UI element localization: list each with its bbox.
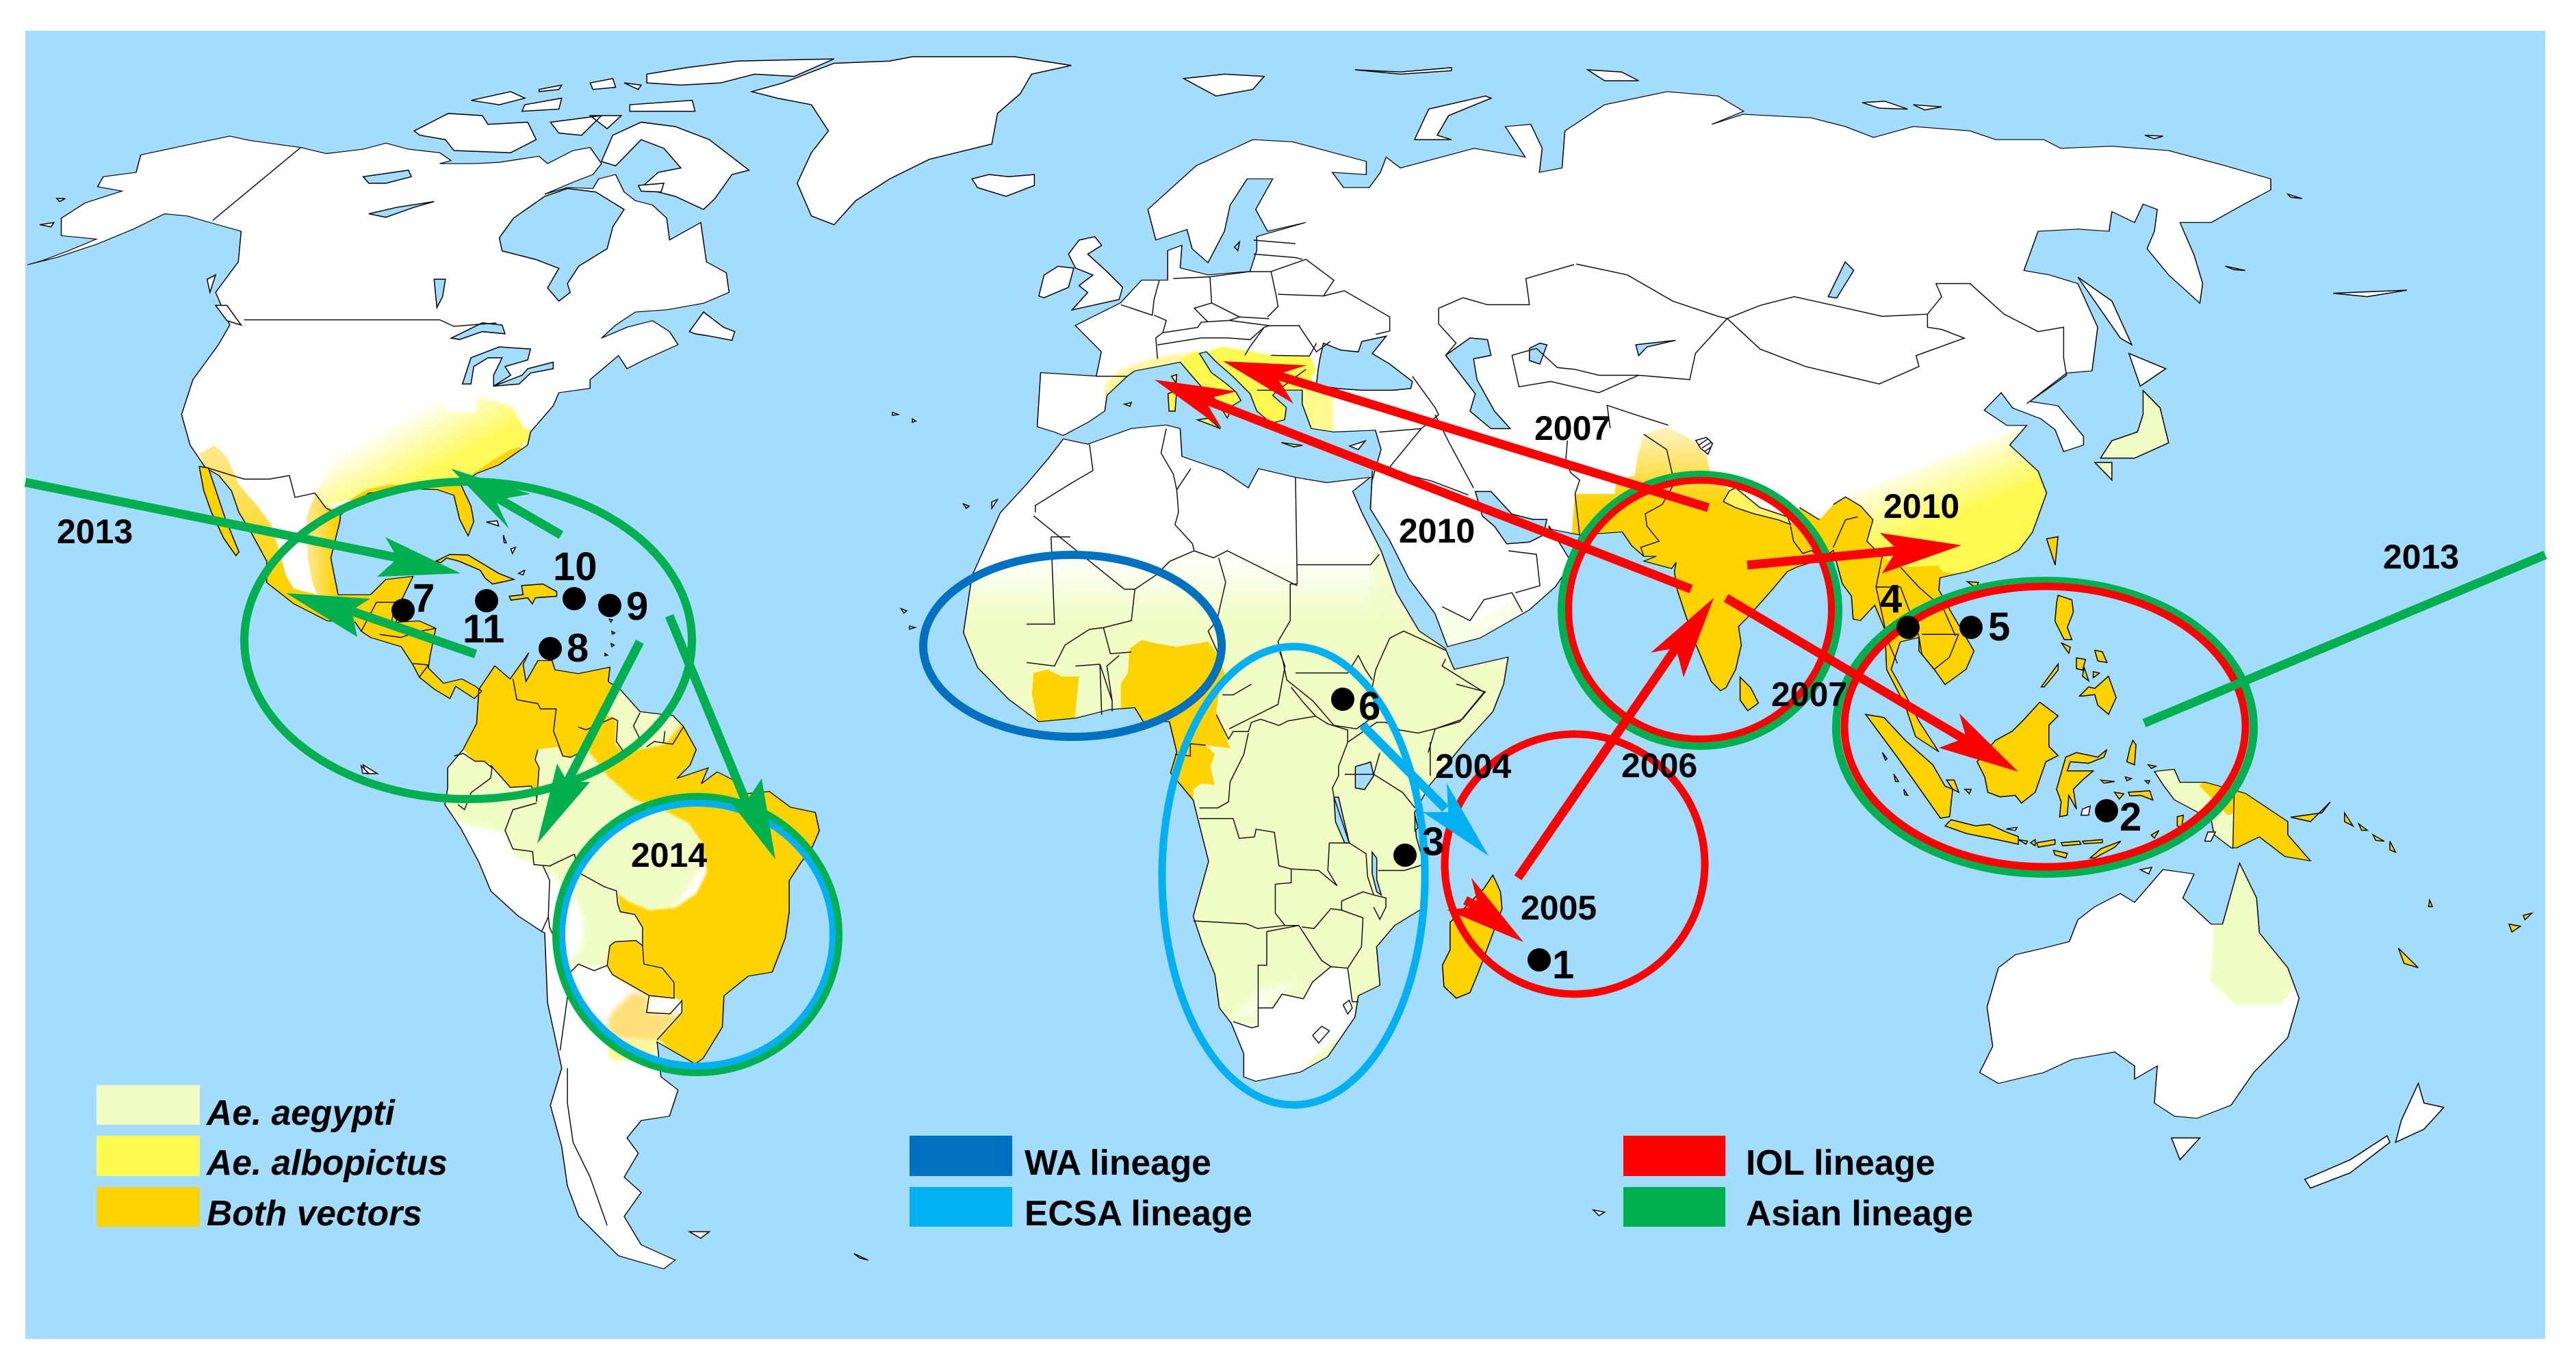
arrow: India to Southeast Asia 2007 (1726, 598, 2018, 772)
region: Peru Bolivia and west Brazil Ae. aegypti (419, 744, 707, 967)
region: Cameroon and Gabon both vectors (1160, 678, 1230, 802)
lineage ring: WA lineage West Africa (923, 555, 1222, 737)
region: Queensland Ae. aegypti (2211, 857, 2293, 1004)
region: Paraguay both vectors (607, 941, 674, 998)
islands: Japan Ae. aegypti (2095, 391, 2169, 480)
lineage ring: IOL and Asian lineages India (1562, 475, 1838, 746)
year labels (57, 409, 2459, 927)
numbered location markers: 5 (1988, 605, 2010, 649)
numbered location markers (391, 545, 2141, 987)
region: Mexico and Central America both vectors (199, 445, 466, 698)
legend: vectors: Ae. aegypti (205, 1093, 396, 1132)
lineage ring: Asian and ECSA lineages Brazil (556, 796, 839, 1073)
numbered location markers: 10 (553, 545, 597, 589)
arrow: East Africa to Indian Ocean 2004 (1363, 725, 1489, 856)
arrow: Asian lineage 2013 into Southeast Asia (2144, 555, 2545, 723)
lineage ring: Asian lineage Caribbean (244, 482, 692, 799)
year labels: 2010 (1399, 512, 1475, 550)
country borders (204, 148, 2234, 1225)
numbered location markers: 9 (626, 584, 648, 629)
arrow: Madagascar to Reunion 2005 (1447, 878, 1523, 942)
arrow: India to China 2010 (1747, 533, 1961, 573)
shading: North and Central America (199, 395, 541, 707)
islands: Caribbean both vectors (199, 467, 556, 604)
year labels: 2013 (2383, 538, 2459, 576)
numbered location markers: 11 (463, 607, 504, 651)
islands: Mediterranean Ae. albopictus (1124, 374, 1302, 447)
arrow: India to Balkans 2007 (1223, 361, 1708, 508)
region: Papua New Guinea both vectors (2200, 777, 2308, 865)
region: Red Sea margin (1367, 539, 1399, 608)
icon: hatched disputed territory (1696, 437, 1712, 454)
island: Madagascar (1443, 875, 1502, 998)
region: Nepal (1723, 488, 1790, 525)
region: Cote d'Ivoire and Ghana both vectors (1032, 669, 1079, 721)
landmasses (27, 92, 2310, 1269)
numbered location markers: 2 (2120, 795, 2141, 839)
lineage ring: IOL lineage Indian Ocean (1445, 734, 1705, 994)
lineage ring: IOL and Asian lineages Southeast Asia (1836, 581, 2254, 874)
shading: South America (419, 634, 864, 1074)
arrow: Indian Ocean to India 2006 (1518, 598, 1714, 878)
arrow: India to Italy 2010 (1155, 380, 1691, 589)
legend: vectors: Ae. albopictus (205, 1143, 448, 1182)
shading: South Asia and China (1571, 427, 2090, 773)
legend: vectors (96, 1085, 448, 1233)
region: New Guinea Ae. aegypti (2150, 764, 2247, 851)
arrow: Caribbean to Mexico (286, 593, 476, 654)
shading: Mediterranean (1104, 347, 1333, 434)
arrow: Asian lineage 2013 into Caribbean (25, 482, 461, 577)
region: eastern Mexico (306, 494, 340, 597)
legend: IOL and Asian lineages (1623, 1136, 1973, 1233)
region: China Ae. albopictus (1833, 428, 2090, 575)
legend: IOL and Asian lineages: Asian lineage (1746, 1193, 1973, 1233)
region: Gulf coast and Florida both vectors (349, 446, 521, 535)
arrow: Caribbean to Florida (451, 469, 561, 535)
year labels: 2004 (1435, 747, 1511, 785)
year labels: 2007 (1534, 409, 1610, 447)
region: Guianas Ae. aegypti (608, 690, 682, 751)
lineage ring: ECSA lineage Africa (1162, 647, 1425, 1105)
region: north Argentina (607, 993, 682, 1043)
year labels: 2007 (1771, 675, 1847, 714)
year labels: 2013 (57, 512, 133, 551)
region: southern Africa unshaded (1221, 967, 1357, 1097)
vector distribution shading (199, 347, 2308, 1097)
year labels: 2005 (1521, 889, 1597, 927)
numbered location markers: 8 (567, 626, 589, 670)
arrow: Caribbean to South America west (537, 642, 640, 844)
legend: IOL and Asian lineages: IOL lineage (1746, 1143, 1935, 1182)
region: Thrace and west Turkey fade (1301, 380, 1333, 434)
region: South and Southeast Asia both vectors (1571, 427, 1998, 773)
region: Yemen and Oman margin (1442, 600, 1530, 666)
islands: Pacific both vectors (2291, 802, 2532, 968)
region: southeast USA Ae. albopictus (315, 395, 541, 506)
inland seas and lakes (363, 170, 1854, 895)
numbered location markers: 6 (1358, 684, 1380, 729)
numbered location markers: 7 (413, 576, 435, 621)
legend: African lineages (910, 1136, 1252, 1233)
arrow: Caribbean to Brazil (669, 616, 775, 859)
islands: Southeast Asia both vectors (1866, 595, 2183, 858)
islands: Asia both vectors (1967, 536, 2058, 588)
region: Balkans Greece and west Turkey Ae. albopictus (1207, 347, 1317, 432)
shading: Africa (1032, 540, 1530, 729)
year labels: 2014 (631, 836, 707, 874)
legend: African lineages: WA lineage (1025, 1143, 1211, 1182)
numbered location markers: 1 (1552, 943, 1574, 987)
legend: African lineages: ECSA lineage (1025, 1193, 1252, 1233)
region: Spain and France Ae. albopictus (1104, 352, 1200, 401)
region: Namibia fade (1230, 980, 1300, 1020)
year labels: 2006 (1621, 746, 1697, 785)
legend: vectors: Both vectors (207, 1193, 422, 1233)
island: Sri Lanka (1740, 677, 1758, 711)
numbered location markers: 4 (1880, 577, 1902, 621)
numbered location markers: 3 (1422, 820, 1444, 864)
region: Italy Ae. albopictus (1181, 352, 1243, 421)
region: Colombia and Venezuela both vectors (463, 658, 614, 799)
region: Brazil both vectors (579, 716, 819, 1062)
land outlines (27, 92, 2310, 1269)
region: central Argentina Ae. albopictus (607, 1040, 657, 1060)
region: Nigeria both vectors (1121, 640, 1226, 729)
year labels: 2010 (1883, 487, 1959, 525)
